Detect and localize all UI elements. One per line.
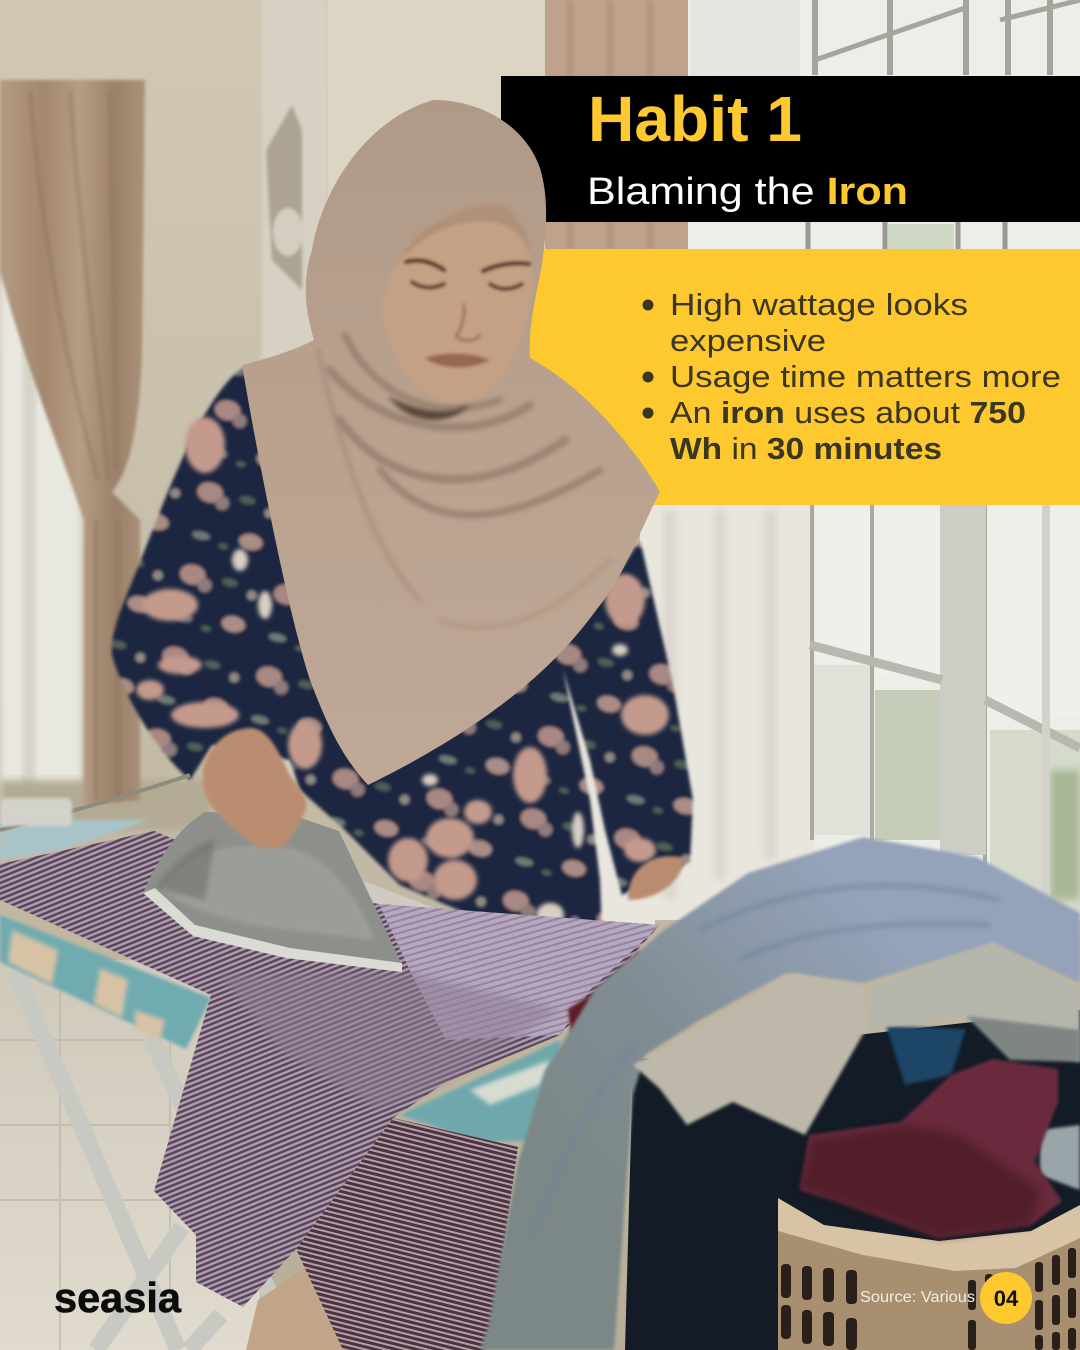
basket body xyxy=(778,1225,1080,1350)
bullet list xyxy=(642,287,1061,466)
bullet list: An iron uses about 750 xyxy=(670,395,1026,430)
burgundy shadow xyxy=(800,1125,1040,1238)
pale board section xyxy=(355,878,440,915)
photo: woman ironing xyxy=(112,100,693,937)
light grey shirt xyxy=(870,943,1080,1062)
face xyxy=(382,204,533,402)
grey shadow cloth xyxy=(966,1016,1080,1062)
scarf folds xyxy=(318,335,610,628)
photo: wall hanging xyxy=(266,105,303,290)
blue garment xyxy=(886,1026,966,1085)
bullet list: expensive xyxy=(670,323,826,358)
face features xyxy=(406,260,529,367)
fabric: midtone section xyxy=(220,973,560,1110)
dress blooms xyxy=(136,417,669,927)
fabric: hanging drape xyxy=(0,831,660,1307)
photo: laundry basket and clothes xyxy=(480,837,1080,1350)
iron cord xyxy=(0,775,190,830)
right side garments xyxy=(1040,1125,1080,1190)
red garment xyxy=(568,950,640,1040)
dress with floral print xyxy=(112,368,693,937)
burgundy garment xyxy=(800,1059,1062,1238)
source note: Source: Various xyxy=(860,1289,975,1306)
dark backing of the pile xyxy=(625,1010,1080,1350)
scarf xyxy=(242,100,660,785)
grey dangling cloth and blue blanket xyxy=(480,837,1080,1350)
panel: key points xyxy=(520,249,1080,505)
fabric: lavender section xyxy=(379,904,660,1040)
beige shirt xyxy=(633,973,866,1135)
basket holes xyxy=(781,1248,1076,1350)
bullet list: Wh in 30 minutes xyxy=(670,431,942,466)
bullet list: Usage time matters more xyxy=(670,359,1061,394)
subheading: Blaming the Iron: Blaming the Iron xyxy=(587,171,908,213)
forehead band xyxy=(402,204,532,262)
icon: steam iron xyxy=(143,812,402,972)
basket rim xyxy=(778,1198,1080,1271)
page number badge xyxy=(980,1272,1032,1324)
bullet list: High wattage looks xyxy=(670,287,968,322)
photo: left curtain xyxy=(0,80,145,805)
chin shadow xyxy=(388,396,470,420)
logo: seasia: seasia xyxy=(54,1274,182,1321)
board legs xyxy=(14,969,296,1350)
heading: Habit 1: Habit 1 xyxy=(588,83,802,155)
page number badge: 04 xyxy=(994,1286,1019,1311)
other hand xyxy=(628,856,685,900)
board cover xyxy=(0,915,211,1049)
leg skin tone xyxy=(246,1240,345,1350)
photo: window and sheer curtain xyxy=(545,0,1080,920)
hand on iron xyxy=(203,728,306,848)
fabric: lower drape xyxy=(296,1118,518,1350)
header panel xyxy=(501,76,1080,222)
photo: ironing board and fabric xyxy=(0,728,685,1350)
blanket folds xyxy=(530,886,1000,1240)
